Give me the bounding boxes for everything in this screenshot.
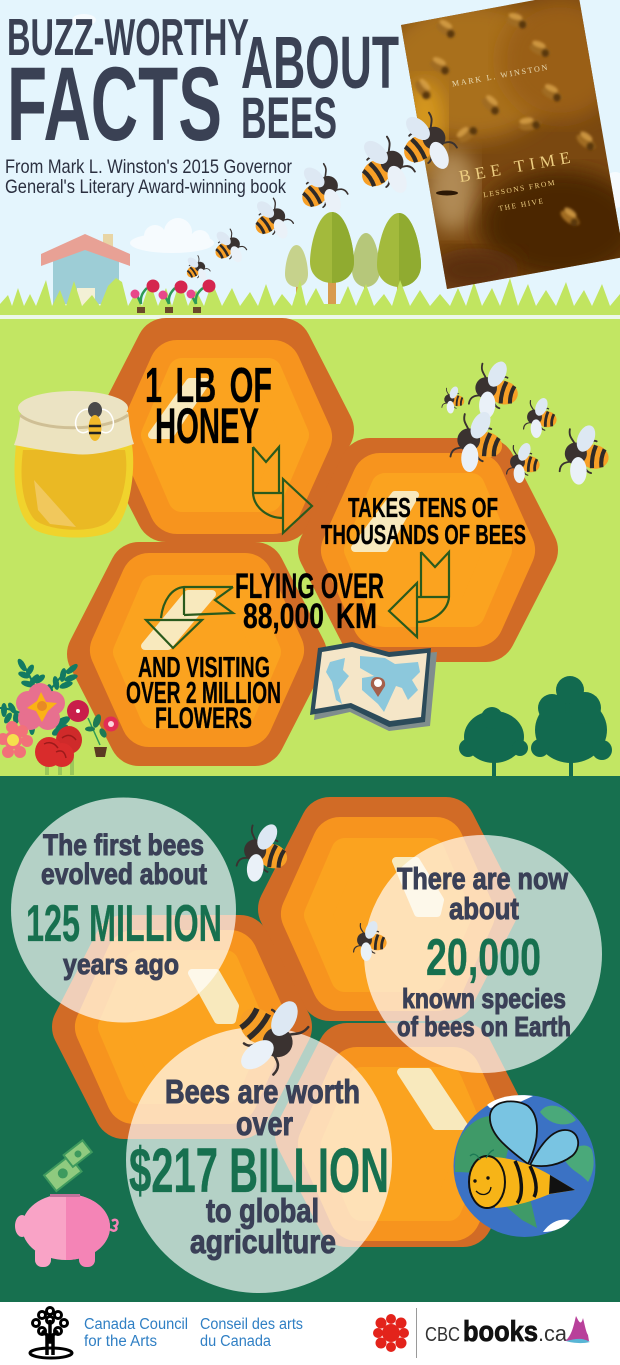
text: Conseil des arts: du Canada <box>200 1333 271 1350</box>
swarm of bees <box>441 355 614 491</box>
text: Canada Council <box>84 1316 188 1350</box>
header background <box>0 0 620 320</box>
circle: global agriculture: $217 BILLION <box>129 1136 389 1206</box>
illustration: house <box>41 234 130 305</box>
circle: first bees: The first bees <box>43 829 204 862</box>
book cover: Bee Time: LESSONS FROM <box>483 178 557 199</box>
circle: first bees: evolved about <box>41 858 207 891</box>
circle: known species: about <box>449 891 519 926</box>
arrow 2 <box>389 552 449 637</box>
text: Canada Council: Canada Council <box>84 1316 188 1333</box>
map icon <box>310 642 437 731</box>
circle: global agriculture: over <box>236 1105 293 1142</box>
ground stripe <box>0 315 620 319</box>
book cover: Bee Time: BEE TIME <box>457 147 577 186</box>
fact: flying over 88,000 km <box>235 567 384 636</box>
bee: centre <box>215 980 319 1087</box>
circle: known species: 20,000 <box>426 929 541 987</box>
grass <box>0 278 620 315</box>
section background: bee facts <box>0 776 620 1302</box>
logo: CBC books.ca <box>425 1316 590 1348</box>
piggy bank with money <box>15 1140 118 1267</box>
arrow 1 <box>253 447 312 533</box>
circle: global agriculture: Bees are worth <box>165 1073 360 1110</box>
fact: 1 lb of honey <box>145 359 272 454</box>
fact: visiting 2 million flowers: AND VISITING <box>138 652 270 684</box>
fact: flying over 88,000 km: 88,000 KM <box>243 597 377 636</box>
circle: global agriculture <box>126 1027 392 1293</box>
circle: first bees <box>11 798 236 1022</box>
section background: honey journey <box>0 319 620 776</box>
title: BEES <box>241 86 337 151</box>
footer background <box>0 1302 620 1365</box>
fact: flying over 88,000 km: FLYING OVER <box>235 567 384 606</box>
circle: known species <box>364 835 602 1073</box>
silhouette trees <box>459 676 612 776</box>
fact: tens of thousands of bees <box>321 492 526 550</box>
honey jar <box>14 391 134 538</box>
logo: CBC gem <box>373 1314 409 1352</box>
logo: CBC books.ca: books <box>463 1316 538 1348</box>
circle: known species: There are now <box>397 861 569 896</box>
title: ABOUT <box>241 21 399 104</box>
flying bee trail <box>179 104 464 287</box>
circle: known species: known species <box>402 983 566 1014</box>
book cover: Bee Time: THE HIVE <box>498 196 545 213</box>
title: BUZZ-WORTHY <box>7 9 249 67</box>
subtitle: From Mark L. Winston's 2015 Governor <box>5 156 292 178</box>
bee on jar <box>72 402 117 441</box>
flower bouquet <box>0 657 118 775</box>
subtitle: General's Literary Award-winning book <box>5 176 286 198</box>
text: Conseil des arts: Conseil des arts <box>200 1316 303 1333</box>
fact: tens of thousands of bees: THOUSANDS OF BEES <box>321 519 526 550</box>
circle: known species: of bees on Earth <box>397 1011 571 1042</box>
circle: first bees: 125 MILLION <box>26 895 222 953</box>
subtitle <box>5 156 292 198</box>
circle: global agriculture: to global <box>206 1192 319 1229</box>
fact: visiting 2 million flowers <box>126 652 281 735</box>
logo: Canada Council tree <box>30 1308 72 1358</box>
fact: tens of thousands of bees: TAKES TENS OF <box>348 492 498 523</box>
illustration: trees <box>285 212 421 304</box>
fact: visiting 2 million flowers: OVER 2 MILLION <box>126 675 281 710</box>
text: Canada Council: for the Arts <box>84 1333 157 1350</box>
globe with bee <box>454 1095 596 1237</box>
title: FACTS <box>7 46 222 163</box>
bee: upper <box>233 816 296 891</box>
circle: first bees: years ago <box>63 949 179 981</box>
fact: 1 lb of honey: HONEY <box>155 398 259 454</box>
book cover: Bee Time <box>380 0 620 292</box>
title <box>7 9 399 163</box>
logo: CBC books.ca: CBC <box>425 1324 460 1346</box>
bee: middle <box>352 917 390 965</box>
arrow 3 <box>146 587 233 648</box>
fact: 1 lb of honey: 1 LB OF <box>145 359 272 413</box>
clouds <box>72 14 620 253</box>
honeycomb: bee facts <box>82 827 505 1217</box>
book cover: Bee Time: MARK L. WINSTON <box>451 63 550 89</box>
logo: CBC books.ca: .ca <box>538 1321 568 1346</box>
honeycomb: honey journey <box>97 348 528 736</box>
potted flowers <box>130 280 216 313</box>
divider <box>416 1308 417 1358</box>
fact: visiting 2 million flowers: FLOWERS <box>155 702 252 735</box>
text: Conseil des arts <box>200 1316 303 1350</box>
circle: global agriculture: agriculture <box>190 1223 336 1260</box>
